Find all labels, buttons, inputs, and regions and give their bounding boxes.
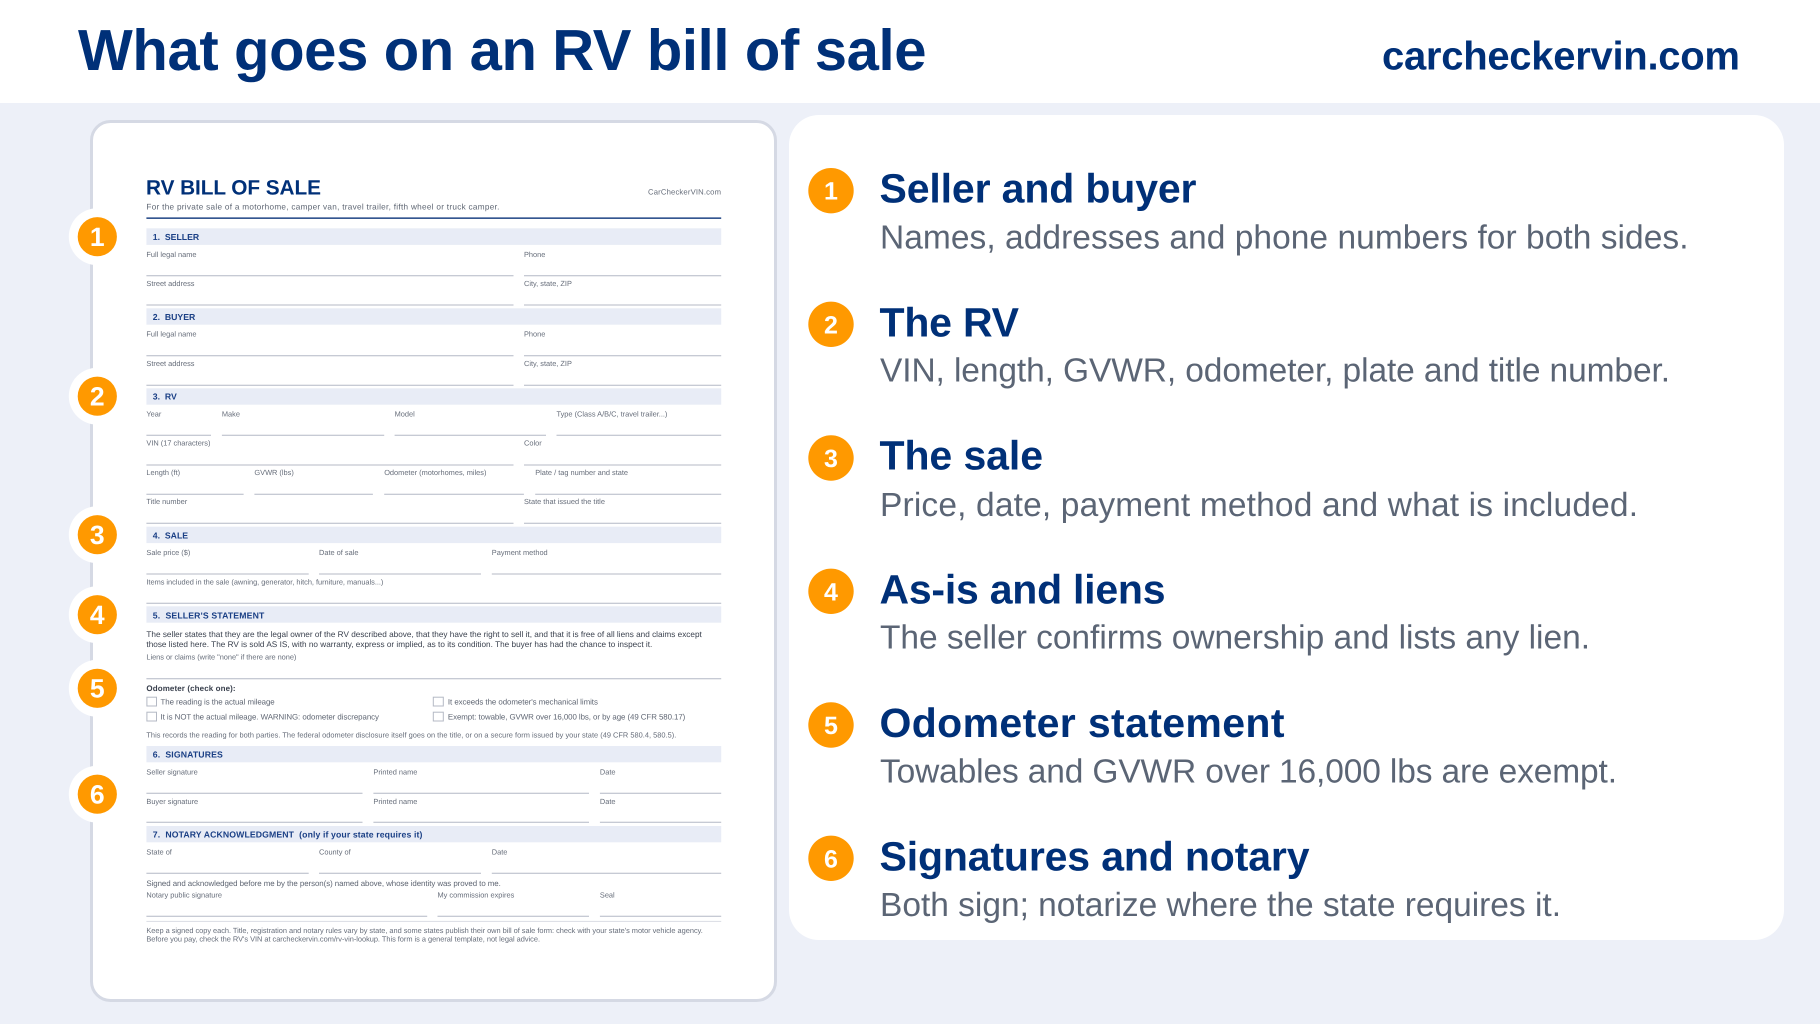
- section 5: seller's statement and odometer: [146, 606, 721, 740]
- item 1: seller and buyer: 1: [824, 178, 838, 206]
- section 5: seller's statement and odometer: This records the reading for both parties. The federal odometer disclosure itself goes on the title, or on a secure form issued by your state (49 CFR 580.4, 580.5).: [146, 731, 676, 740]
- section 4: sale: Items included in the sale (awning, generator, hitch, furniture, manuals...): [146, 577, 383, 586]
- section 6: signatures: 6. SIGNATURES: [153, 750, 223, 760]
- section 2: buyer: 2. BUYER: [153, 312, 196, 322]
- section 1: seller: [146, 228, 721, 306]
- section 6: signatures: Buyer signature: [146, 797, 198, 806]
- odometer checkboxes: Exempt: towable, GVWR over 16,000 lbs, or by age (49 CFR 580.17): [448, 713, 686, 722]
- form marker 4: 4: [90, 600, 105, 630]
- odometer checkboxes: [147, 697, 686, 722]
- odometer checkboxes: It is NOT the actual mileage. WARNING: odometer discrepancy: [160, 713, 379, 722]
- item 6: signatures and notary: Both sign; notarize where the state requires it.: [880, 887, 1561, 924]
- title: What goes on an RV bill of sale: [78, 18, 926, 83]
- item 2: the RV: [808, 299, 1670, 390]
- section 2: buyer: Full legal name: [146, 330, 197, 339]
- section 4: sale: 4. SALE: [153, 530, 188, 540]
- section 7: notary acknowledgment: Notary public signature: [146, 891, 222, 900]
- section 2: buyer: Phone: [524, 330, 545, 339]
- section 3: RV: GVWR (lbs): [254, 468, 294, 477]
- form marker 2: [69, 368, 126, 425]
- item 1: seller and buyer: Names, addresses and phone numbers for both sides.: [880, 219, 1688, 256]
- footer note: [146, 921, 721, 944]
- section 3: RV: VIN (17 characters): [146, 439, 210, 448]
- odometer checkboxes: It exceeds the odometer's mechanical limits: [448, 698, 598, 707]
- form heading: CarCheckerVIN.com: [648, 187, 721, 196]
- section 3: RV: [146, 388, 721, 524]
- panel: bill of sale form: [92, 122, 776, 1000]
- section 3: RV: State that issued the title: [524, 497, 605, 506]
- section 6: signatures: [146, 746, 721, 823]
- item 3: the sale: 3: [824, 445, 838, 473]
- section 4: sale: Sale price ($): [146, 548, 190, 557]
- section 7: notary acknowledgment: Date: [492, 848, 507, 857]
- odometer checkboxes: The reading is the actual mileage: [160, 698, 275, 707]
- header bar: [0, 0, 1820, 103]
- section 1: seller: 1. SELLER: [153, 232, 200, 242]
- item 4: as-is and liens: 4: [824, 578, 838, 606]
- section 3: RV: Plate / tag number and state: [535, 468, 628, 477]
- panel: checklist: [789, 115, 1784, 940]
- form marker 6: [69, 766, 126, 823]
- section 7: notary acknowledgment: My commission expires: [438, 891, 515, 900]
- section 3: RV: Title number: [146, 497, 188, 506]
- form marker 1: [69, 208, 126, 265]
- section 6: signatures: Printed name: [373, 768, 417, 777]
- section 2: buyer: Street address: [146, 359, 195, 368]
- footer note: Keep a signed copy each. Title, registration and notary rules vary by state, and some states publish their own bill of sale form: check with your state's motor vehicle agency.: [146, 926, 703, 935]
- section 2: buyer: City, state, ZIP: [524, 359, 572, 368]
- section 7: notary acknowledgment: State of: [146, 848, 173, 857]
- item 3: the sale: The sale: [880, 433, 1043, 479]
- form marker 5: [69, 660, 126, 717]
- section 3: RV: Make: [222, 410, 240, 419]
- item 4: as-is and liens: As-is and liens: [880, 567, 1166, 613]
- section 6: signatures: Date: [600, 768, 616, 777]
- form marker 1: 1: [90, 222, 105, 252]
- section 3: RV: Color: [524, 439, 542, 448]
- item 5: odometer statement: Odometer statement: [880, 700, 1285, 746]
- item 2: the RV: 2: [824, 311, 838, 339]
- section 4: sale: [146, 527, 721, 604]
- form marker 5: 5: [90, 674, 105, 704]
- section 2: buyer: [146, 308, 721, 386]
- section 5: seller's statement and odometer: 5. SELLER'S STATEMENT: [153, 610, 265, 620]
- item 5: odometer statement: Towables and GVWR over 16,000 lbs are exempt.: [880, 754, 1617, 791]
- item 1: seller and buyer: [808, 166, 1688, 256]
- form marker 2: 2: [90, 382, 105, 412]
- section 3: RV: Year: [146, 410, 162, 419]
- item 6: signatures and notary: [808, 833, 1561, 924]
- section 7: notary acknowledgment: Signed and acknowledged before me by the person(s) named above, whose identity was proved to me.: [146, 879, 501, 888]
- item 5: odometer statement: 5: [824, 712, 838, 740]
- item 4: as-is and liens: The seller confirms ownership and lists any lien.: [880, 619, 1590, 656]
- footer note: Before you pay, check the RV's VIN at carcheckervin.com/rv-vin-lookup. This form is a general template, not legal advice.: [146, 935, 540, 944]
- site name: carcheckervin.com: [1382, 34, 1740, 78]
- item 3: the sale: [808, 433, 1638, 524]
- section 3: RV: Type (Class A/B/C, travel trailer...): [556, 410, 667, 419]
- form marker 6: 6: [90, 780, 105, 810]
- item 5: odometer statement: [808, 700, 1617, 791]
- section 4: sale: Date of sale: [319, 548, 358, 557]
- section 6: signatures: Seller signature: [146, 768, 198, 777]
- item 1: seller and buyer: Seller and buyer: [880, 166, 1197, 212]
- section 6: signatures: Printed name: [373, 797, 417, 806]
- form heading: [146, 177, 721, 219]
- form heading: RV BILL OF SALE: [146, 177, 321, 200]
- section 5: seller's statement and odometer: Odometer (check one):: [146, 684, 236, 693]
- section 5: seller's statement and odometer: Liens or claims (write "none" if there are none): [146, 653, 296, 662]
- section 1: seller: City, state, ZIP: [524, 279, 572, 288]
- section 3: RV: Model: [395, 410, 415, 419]
- form marker 3: [69, 506, 126, 563]
- item 2: the RV: The RV: [880, 299, 1020, 345]
- item 3: the sale: Price, date, payment method and what is included.: [880, 487, 1638, 524]
- section 4: sale: Payment method: [492, 548, 548, 557]
- section 5: seller's statement and odometer: The seller states that they are the legal owner of the RV described above, that they have the right to sell it, and that it is free of all liens and claims except: [146, 630, 703, 639]
- section 7: notary acknowledgment: Seal: [600, 891, 615, 900]
- item 4: as-is and liens: [808, 567, 1590, 656]
- section 3: RV: Odometer (motorhomes, miles): [384, 468, 486, 477]
- item 2: the RV: VIN, length, GVWR, odometer, plate and title number.: [880, 353, 1670, 390]
- section 3: RV: Length (ft): [146, 468, 180, 477]
- section 3: RV: 3. RV: [153, 392, 177, 402]
- section 1: seller: Full legal name: [146, 250, 197, 259]
- form marker 4: [69, 586, 126, 643]
- section 1: seller: Street address: [146, 279, 195, 288]
- form marker 3: 3: [90, 520, 105, 550]
- item 6: signatures and notary: Signatures and notary: [880, 833, 1310, 879]
- section 7: notary acknowledgment: 7. NOTARY ACKNOWLEDGMENT (only if your state requires it): [153, 829, 422, 839]
- section 6: signatures: Date: [600, 797, 616, 806]
- section 1: seller: Phone: [524, 250, 545, 259]
- section 7: notary acknowledgment: [146, 826, 721, 917]
- form heading: For the private sale of a motorhome, camper van, travel trailer, fifth wheel or truck camper.: [146, 202, 499, 211]
- item 6: signatures and notary: 6: [824, 845, 838, 873]
- section 7: notary acknowledgment: County of: [319, 848, 352, 857]
- section 5: seller's statement and odometer: those listed here. The RV is sold AS IS, with no warranty, express or implied, as to its condition. The buyer has had the chance to inspect it.: [146, 640, 652, 649]
